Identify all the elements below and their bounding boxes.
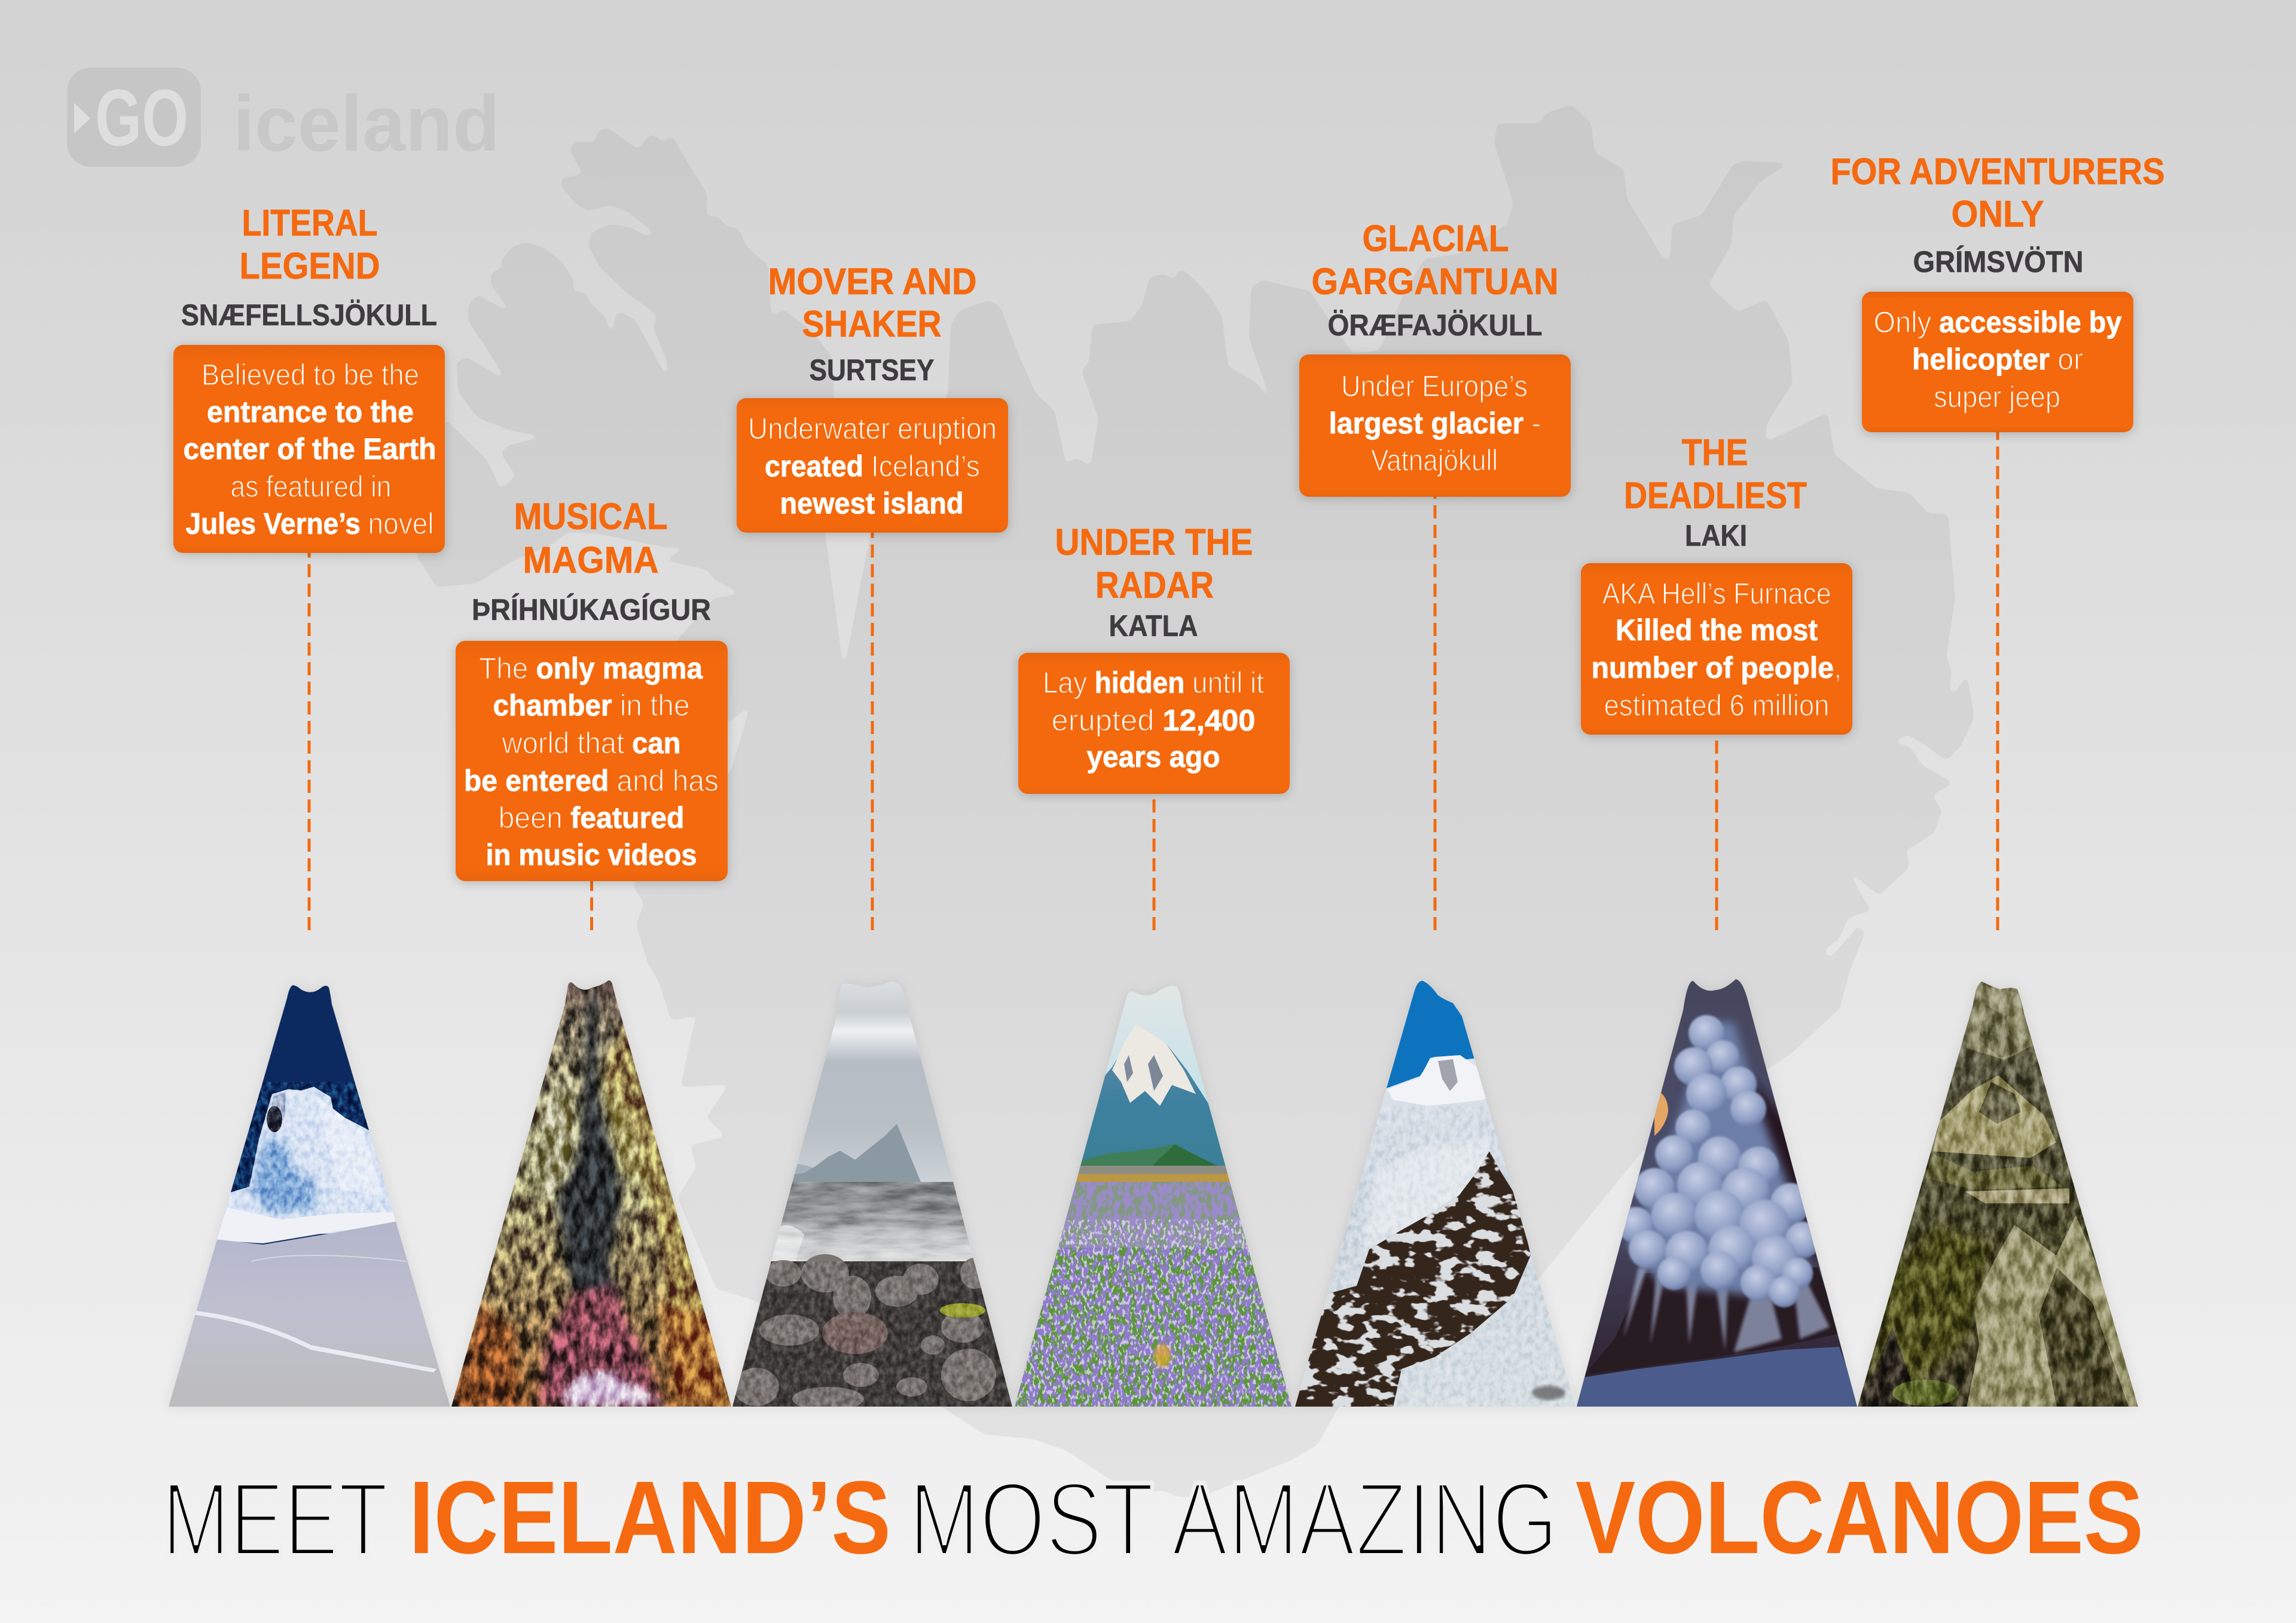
heading: The Deadliest bbox=[1624, 432, 1807, 516]
background map of Iceland bbox=[417, 105, 1974, 1497]
heading: Mover and Shaker: SHAKER bbox=[802, 304, 941, 345]
panel: Musical Magma bbox=[456, 496, 728, 881]
dashed connector lines bbox=[309, 432, 1998, 930]
callout: Surtsey: created Iceland’s bbox=[765, 450, 980, 483]
callout: Grímsvötn: super jeep bbox=[1934, 380, 2060, 414]
callout: Laki: AKA Hell’s Furnace bbox=[1602, 577, 1831, 610]
callout: Þríhnúkagígur: The only magma bbox=[479, 652, 703, 685]
heading: Glacial Gargantuan: GARGANTUAN bbox=[1312, 261, 1558, 302]
callout: Snæfellsjökull bbox=[173, 345, 445, 553]
panel: The Deadliest bbox=[1581, 432, 1852, 735]
callout: Þríhnúkagígur: chamber in the bbox=[493, 689, 690, 722]
volcano image: Grímsvötn, mossy ridges from above bbox=[1851, 974, 2144, 1411]
volcano name: Öræfajökull: ÖRÆFAJÖKULL bbox=[1327, 308, 1543, 342]
callout: Grímsvötn: Only accessible by bbox=[1874, 305, 2122, 339]
callout: Laki bbox=[1581, 563, 1852, 735]
panel: Literal Legend bbox=[173, 203, 445, 553]
callout: Katla: erupted 12,400 bbox=[1051, 704, 1256, 737]
callout: Öræfajökull bbox=[1299, 354, 1571, 497]
panel: Under the Radar bbox=[1018, 522, 1290, 794]
title: ICELAND’S bbox=[409, 1459, 891, 1575]
heading: The Deadliest: THE bbox=[1681, 432, 1748, 473]
callout: Þríhnúkagígur bbox=[456, 641, 728, 881]
heading: Musical Magma bbox=[514, 496, 667, 581]
callout: Snæfellsjökull: Jules Verne’s novel bbox=[185, 507, 434, 540]
title: MOST AMAZING bbox=[909, 1461, 1558, 1578]
volcano name: Snæfellsjökull: SNÆFELLSJÖKULL bbox=[181, 298, 437, 332]
heading: The Deadliest: DEADLIEST bbox=[1624, 475, 1807, 516]
callout: Katla bbox=[1018, 653, 1290, 794]
volcano image: Öræfajökull, glacier and dark rock bbox=[1286, 974, 1584, 1411]
heading: Under the Radar: RADAR bbox=[1095, 565, 1214, 606]
heading: Mover and Shaker: MOVER AND bbox=[768, 261, 977, 302]
volcano name: Surtsey: SURTSEY bbox=[810, 353, 934, 387]
volcano image: Surtsey, stormy coast with boulders bbox=[718, 974, 1019, 1411]
heading: Musical Magma: MAGMA bbox=[523, 540, 659, 581]
volcano image: Katla, snow peak above a lupin field bbox=[1010, 980, 1297, 1411]
callout: Grímsvötn: helicopter or bbox=[1912, 343, 2083, 376]
logo: GO iceland: iceland bbox=[233, 80, 500, 167]
logo: GO iceland bbox=[67, 68, 500, 167]
callout: Öræfajökull: largest glacier - bbox=[1329, 406, 1541, 440]
heading: For Adventurers Only bbox=[1831, 151, 2164, 235]
heading: Literal Legend: LITERAL bbox=[242, 203, 378, 244]
panel: For Adventurers Only bbox=[1831, 151, 2164, 432]
volcano image: Þríhnúkagígur, multicoloured magma chamber bbox=[445, 974, 738, 1411]
heading: Under the Radar bbox=[1055, 522, 1253, 606]
volcano image: Laki, ash plume from above bbox=[1570, 974, 1863, 1411]
title: VOLCANOES bbox=[1576, 1459, 2144, 1575]
callout: Katla: years ago bbox=[1087, 740, 1220, 774]
callout: Laki: estimated 6 million bbox=[1604, 689, 1830, 722]
callout: Surtsey: newest island bbox=[780, 487, 964, 520]
callout: Öræfajökull: Vatnajökull bbox=[1371, 444, 1498, 477]
heading: Musical Magma: MUSICAL bbox=[514, 496, 667, 537]
callout: Þríhnúkagígur: been featured bbox=[499, 801, 684, 835]
panel: Glacial Gargantuan bbox=[1299, 218, 1571, 497]
heading: Literal Legend: LEGEND bbox=[239, 246, 380, 287]
heading: Glacial Gargantuan bbox=[1312, 218, 1558, 302]
heading: Glacial Gargantuan: GLACIAL bbox=[1362, 218, 1509, 259]
callout: Öræfajökull: Under Europe’s bbox=[1341, 369, 1528, 403]
callout: Laki: Killed the most bbox=[1616, 613, 1818, 647]
callout: Snæfellsjökull: center of the Earth bbox=[183, 432, 436, 466]
callout: Katla: Lay hidden until it bbox=[1043, 666, 1264, 699]
heading: Under the Radar: UNDER THE bbox=[1055, 522, 1253, 563]
volcano name: Laki: LAKI bbox=[1685, 519, 1747, 552]
callout: Snæfellsjökull: entrance to the bbox=[207, 395, 414, 429]
title bbox=[162, 1459, 2144, 1578]
callout: Laki: number of people, bbox=[1592, 651, 1842, 684]
callout: Þríhnúkagígur: be entered and has bbox=[464, 764, 719, 797]
heading: For Adventurers Only: ONLY bbox=[1952, 194, 2044, 235]
callout: Surtsey bbox=[737, 398, 1008, 533]
callout: Þríhnúkagígur: in music videos bbox=[486, 838, 697, 872]
volcano name: Þríhnúkagígur: ÞRÍHNÚKAGÍGUR bbox=[472, 593, 711, 626]
volcano name: Katla: KATLA bbox=[1109, 609, 1198, 643]
heading: For Adventurers Only: FOR ADVENTURERS bbox=[1831, 151, 2164, 192]
callout: Grímsvötn bbox=[1862, 292, 2133, 432]
heading: Mover and Shaker bbox=[768, 261, 977, 345]
callout: Surtsey: Underwater eruption bbox=[748, 412, 997, 445]
volcano name: Grímsvötn: GRÍMSVÖTN bbox=[1913, 245, 2083, 279]
callout: Snæfellsjökull: Believed to be the bbox=[201, 358, 419, 392]
volcano image: Snæfellsjökull, ice formation under a navy sky bbox=[161, 974, 460, 1411]
logo: GO iceland: GO bbox=[95, 74, 188, 163]
title: MEET bbox=[162, 1461, 388, 1578]
heading: Literal Legend bbox=[239, 203, 380, 287]
callout: Snæfellsjökull: as featured in bbox=[231, 470, 391, 503]
panel: Mover and Shaker bbox=[737, 261, 1008, 533]
callout: Þríhnúkagígur: world that can bbox=[502, 726, 680, 760]
